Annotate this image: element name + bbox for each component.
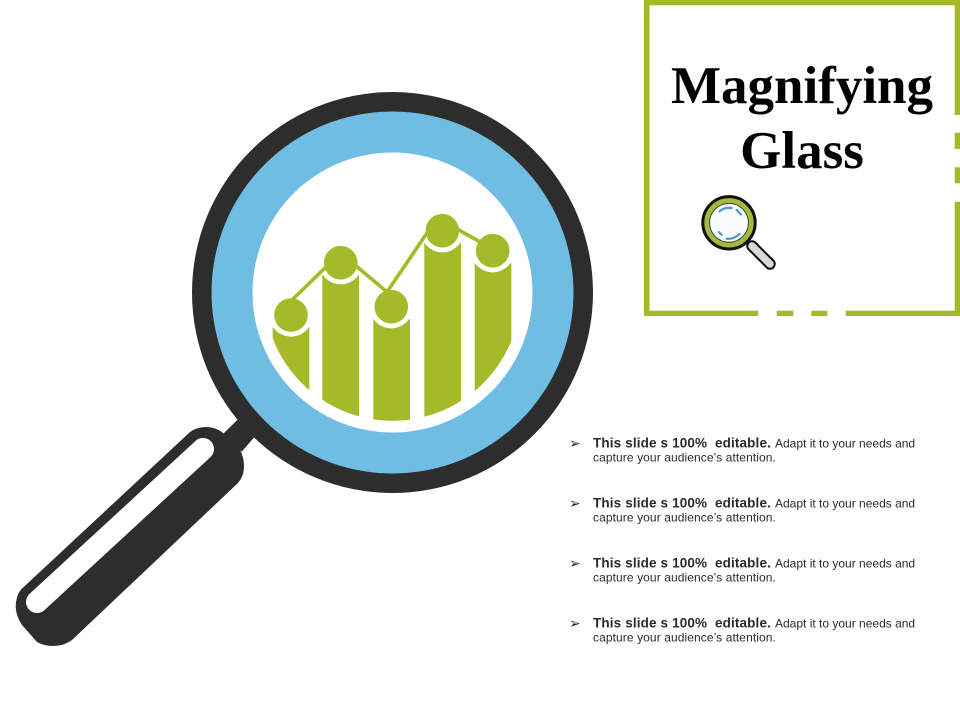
small icon lens bbox=[703, 197, 755, 249]
list item 3: capture your audience’s attention. bbox=[593, 570, 776, 584]
list item 1: This slide s 100% editable. bbox=[593, 436, 771, 450]
panel: title frame bbox=[644, 0, 960, 316]
list item 2: capture your audience’s attention. bbox=[593, 510, 776, 524]
lens outer ring bbox=[192, 92, 593, 493]
chart inside lens bbox=[272, 214, 512, 421]
list item 3 bbox=[569, 556, 915, 584]
title bbox=[671, 57, 933, 180]
title: Magnifying bbox=[671, 57, 933, 115]
list item 1 bbox=[569, 436, 915, 464]
list item 4: Adapt it to your needs and bbox=[775, 616, 915, 630]
list item 2: Adapt it to your needs and bbox=[775, 496, 915, 510]
list item 4: ➢ bbox=[569, 616, 581, 632]
magnifier neck bbox=[223, 405, 268, 452]
white circle cut-outs above bars bbox=[269, 209, 514, 337]
list item 1: Adapt it to your needs and bbox=[775, 436, 915, 450]
trend data points bbox=[274, 214, 510, 332]
list item 2: This slide s 100% editable. bbox=[593, 496, 771, 510]
small icon lens glints bbox=[719, 208, 741, 239]
lens blue ring bbox=[212, 112, 574, 474]
list item 4: This slide s 100% editable. bbox=[593, 616, 771, 630]
list item 4: capture your audience’s attention. bbox=[593, 630, 776, 644]
list item 3: Adapt it to your needs and bbox=[775, 556, 915, 570]
list item 2 bbox=[569, 496, 915, 524]
list item 3: This slide s 100% editable. bbox=[593, 556, 771, 570]
magnifier handle bbox=[16, 427, 244, 646]
text list bbox=[569, 436, 915, 644]
list item 2: ➢ bbox=[569, 496, 581, 512]
icon: small magnifying glass bbox=[703, 197, 770, 264]
chart bars bbox=[273, 243, 511, 437]
list item 4 bbox=[569, 616, 915, 644]
title: Glass bbox=[740, 122, 864, 180]
lens white centre bbox=[252, 152, 532, 432]
handle highlight slot bbox=[37, 449, 203, 602]
icon: large magnifying glass bbox=[16, 92, 593, 646]
list item 1: ➢ bbox=[569, 436, 581, 452]
list item 1: capture your audience’s attention. bbox=[593, 450, 776, 464]
trend line bbox=[292, 229, 482, 300]
list item 3: ➢ bbox=[569, 556, 581, 572]
small icon handle bbox=[752, 246, 770, 264]
